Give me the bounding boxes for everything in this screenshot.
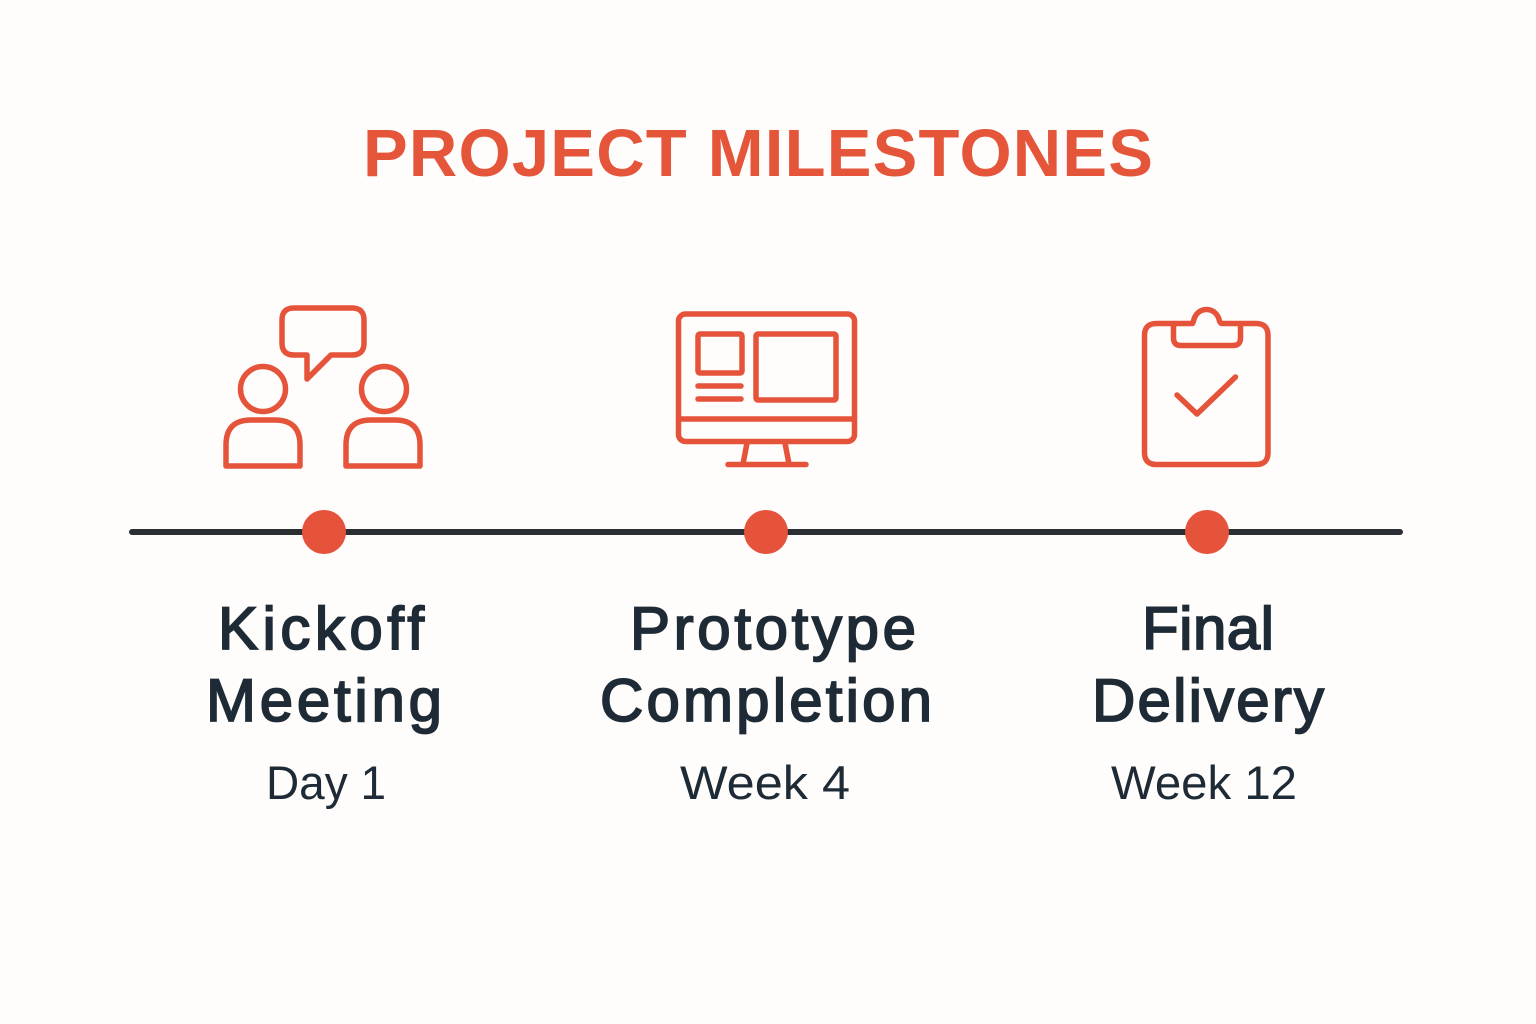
milestone text: prototype: Completion xyxy=(600,667,932,734)
icon: computer monitor xyxy=(678,314,854,464)
milestone dot: prototype xyxy=(744,510,788,554)
milestone text: final: Delivery xyxy=(1092,667,1324,734)
milestone text: final: Final xyxy=(1142,595,1274,662)
title: PROJECT MILESTONES xyxy=(363,116,1153,191)
milestone dot: kickoff xyxy=(302,510,346,554)
milestone text: prototype: Week 4 xyxy=(680,756,850,809)
milestone text: final xyxy=(1092,595,1324,809)
milestone text: kickoff xyxy=(206,595,442,809)
milestone text: kickoff: Kickoff xyxy=(218,595,424,662)
icon: two people talking xyxy=(226,308,420,466)
icon: clipboard with check xyxy=(1144,310,1268,464)
milestone text: kickoff: Day 1 xyxy=(266,756,386,809)
milestone text: kickoff: Meeting xyxy=(206,667,442,734)
milestone dot: final xyxy=(1185,510,1229,554)
milestone text: prototype xyxy=(600,595,932,809)
milestone text: final: Week 12 xyxy=(1111,756,1297,809)
milestone text: prototype: Prototype xyxy=(630,595,916,662)
timeline xyxy=(132,510,1400,554)
